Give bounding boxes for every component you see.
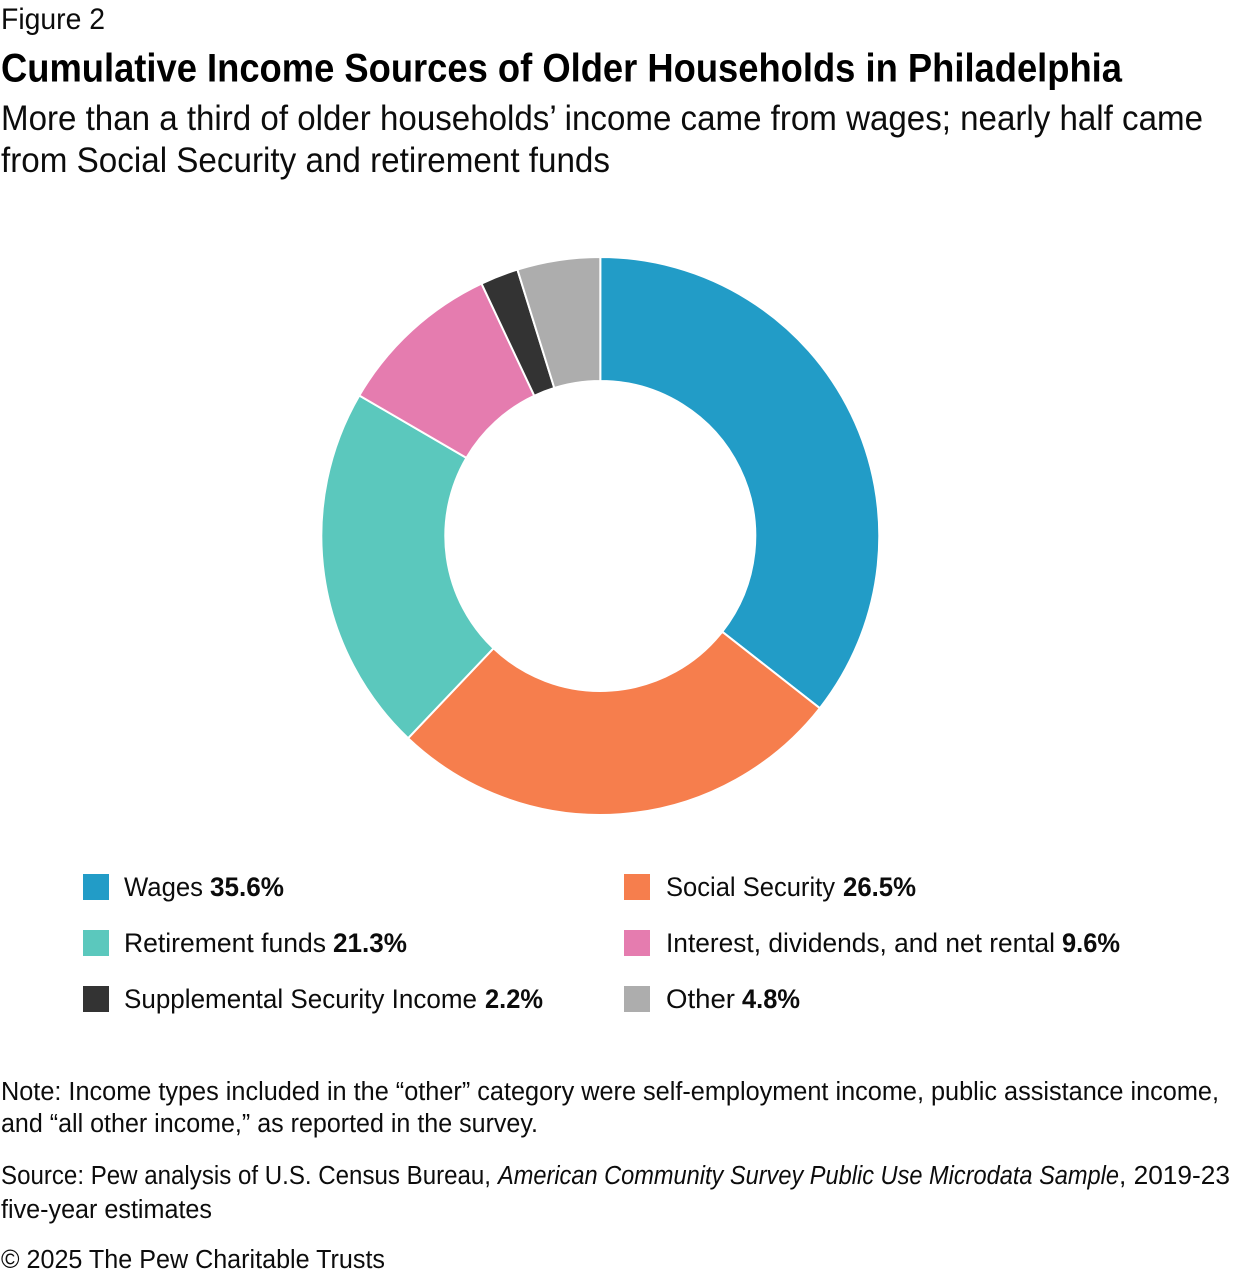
source: American Community Survey Public Use Microdata Sample xyxy=(496,1162,1119,1190)
legend item: wages: 35.6% xyxy=(210,872,284,902)
note: Note: Income types included in the “other” category were self-employment income, public assistance income, xyxy=(1,1078,1219,1106)
legend item: wages xyxy=(83,872,284,902)
legend item: supplemental security income: 2.2% xyxy=(485,984,543,1014)
source: , 2019-23 xyxy=(1119,1162,1230,1190)
source: Source: Pew analysis of U.S. Census Bureau, xyxy=(1,1162,491,1190)
legend item: retirement funds: Retirement funds xyxy=(124,928,326,958)
segment: retirement funds 21.3% xyxy=(321,396,494,738)
legend item: social security: Social Security xyxy=(666,872,836,902)
source: five-year estimates xyxy=(1,1196,212,1224)
legend item: social security xyxy=(624,872,916,902)
legend item: other xyxy=(624,984,800,1014)
source xyxy=(1,1162,1230,1224)
legend item: interest, dividends, and net rental: Interest, dividends, and net rental xyxy=(666,928,1055,958)
legend item: interest, dividends, and net rental: 9.6% xyxy=(1062,928,1120,958)
subtitle: from Social Security and retirement funds xyxy=(1,141,610,180)
note: and “all other income,” as reported in the survey. xyxy=(1,1110,538,1138)
segment: other 4.8% xyxy=(517,257,600,388)
segment: interest, dividends, and net rental 9.6% xyxy=(359,284,534,458)
donut chart xyxy=(321,257,879,815)
legend item: social security: 26.5% xyxy=(843,872,916,902)
legend item: wages: Wages xyxy=(124,872,203,902)
legend item: retirement funds xyxy=(83,928,407,958)
figure label: Figure 2 xyxy=(1,3,105,36)
legend xyxy=(83,872,1120,1014)
note xyxy=(1,1078,1219,1138)
legend item: other: 4.8% xyxy=(742,984,800,1014)
subtitle xyxy=(1,99,1203,180)
legend item: retirement funds: 21.3% xyxy=(333,928,407,958)
subtitle: More than a third of older households’ income came from wages; nearly half came xyxy=(1,99,1203,138)
title: Cumulative Income Sources of Older Households in Philadelphia xyxy=(1,46,1123,90)
legend item: other: Other xyxy=(666,984,735,1014)
legend item: supplemental security income: Supplemental Security Income xyxy=(124,984,477,1014)
segment: social security 26.5% xyxy=(408,632,820,815)
segment: supplemental security income 2.2% xyxy=(482,270,554,396)
segment: wages 35.6% xyxy=(600,257,879,708)
copyright: © 2025 The Pew Charitable Trusts xyxy=(1,1246,385,1274)
